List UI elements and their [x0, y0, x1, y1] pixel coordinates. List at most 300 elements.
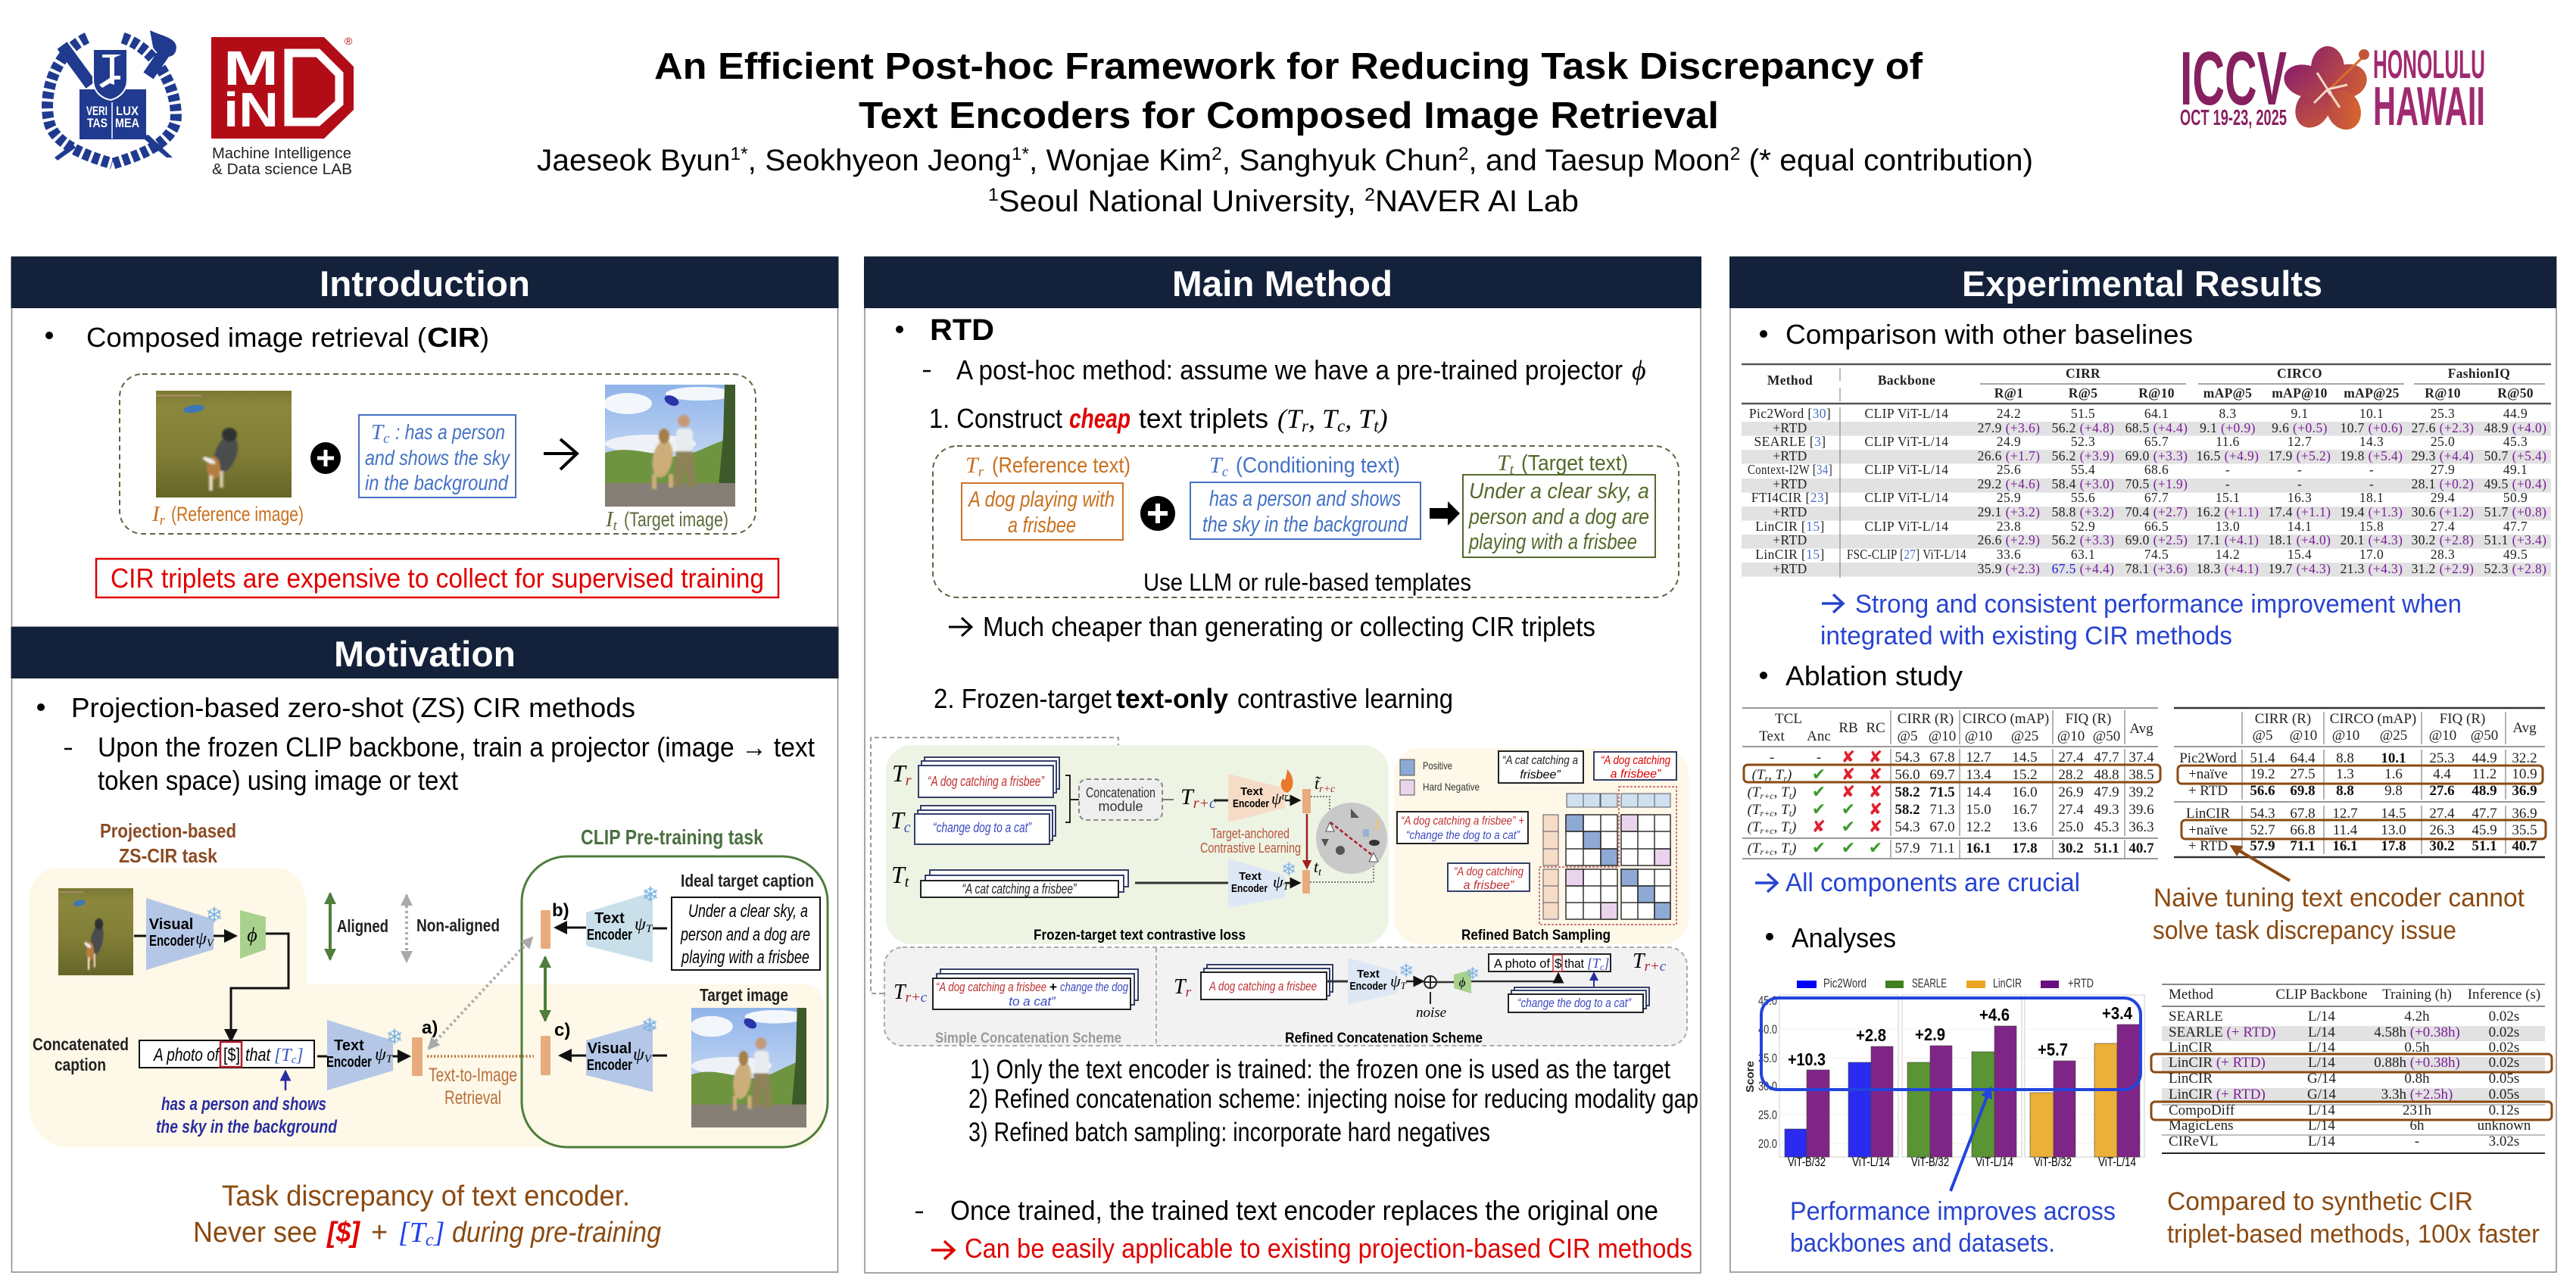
- trainable text encoder: [1228, 769, 1299, 822]
- table: baselines comparison: SEARLE [3]: [1754, 434, 1826, 449]
- caption template box: [T: [274, 1046, 292, 1065]
- table: training time comparison: CLIP Backbone: [2275, 987, 2368, 1003]
- heading: Main Method: [864, 257, 1701, 308]
- table: naive tuning: 54.3: [2250, 806, 2275, 822]
- text-to-image retrieval: Text-to-Image: [429, 1065, 517, 1086]
- panel: introduction: [11, 257, 839, 627]
- table: naive tuning: 56.6: [2250, 783, 2275, 799]
- stack: target text: [921, 870, 1228, 897]
- table: ablation components: 16.7: [2012, 802, 2038, 818]
- y axis: [1744, 993, 1777, 1151]
- table: training time comparison: L/14: [2308, 1055, 2335, 1071]
- logo: MIND lab: ®: [345, 35, 353, 47]
- refined scheme: ϕ: [1459, 975, 1466, 990]
- target text: [1463, 451, 1655, 557]
- table: baselines comparison: 20.1 (+4.3): [2341, 532, 2403, 547]
- table: training time comparison: MagicLens: [2169, 1118, 2233, 1134]
- legend: positive and hard negative: Hard Negative: [1423, 781, 1480, 793]
- reference image label: (Reference image): [171, 503, 304, 525]
- arrow: performance callout: [1951, 1089, 1990, 1191]
- frozen text encoder: Encoder: [1231, 882, 1268, 895]
- table: baselines comparison: CLIP ViT-L/14: [1865, 490, 1948, 505]
- logo: ICCV 2025 Honolulu Hawaii: [2180, 36, 2485, 137]
- chart legend: SEARLE: [1912, 976, 1947, 990]
- table: training time comparison: CIReVL: [2169, 1134, 2218, 1149]
- x axis labels: [1788, 1155, 2136, 1169]
- bullet: composed image retrieval: Composed image retrieval (: [86, 322, 426, 353]
- table: naive tuning: 35.5: [2512, 822, 2537, 838]
- chart legend: Pic2Word: [1823, 976, 1867, 990]
- refined scheme: “change the dog to a cat”: [1517, 996, 1632, 1010]
- table: ablation components: 16.0: [2012, 784, 2038, 800]
- text encoder b: Encoder: [587, 927, 632, 943]
- table: ablation components: r: [1783, 773, 1787, 784]
- table: baselines comparison: FTI4CIR [23]: [1751, 490, 1829, 505]
- table: baselines comparison: 28.1 (+0.2): [2412, 476, 2474, 491]
- authors: 1*: [1012, 144, 1029, 164]
- target image: [603, 385, 735, 507]
- frozen text encoder: [1228, 859, 1299, 908]
- table: ablation components: 49.3: [2094, 802, 2119, 818]
- ideal target caption: person and a dog are: [680, 925, 810, 945]
- table: naive tuning: 4.4: [2433, 766, 2451, 782]
- table: baselines comparison: 35.9 (+2.3): [1978, 561, 2040, 576]
- table: baselines comparison: Pic2Word [30]: [1749, 406, 1831, 421]
- numbered method notes: 2) Refined concatenation scheme: injecting noise for reducing modality gap: [968, 1084, 1698, 1114]
- input labels: t: [905, 874, 909, 890]
- refined scheme: ❄: [1399, 960, 1414, 981]
- refined scheme: Text: [1357, 968, 1380, 981]
- simple scheme: Simple Concatenation Scheme: [935, 1031, 1121, 1046]
- title: [654, 46, 1923, 136]
- table: baselines comparison: mAP@25: [2344, 385, 2400, 401]
- CIR triplet example: [120, 374, 756, 534]
- table: ablation components: t: [1789, 847, 1792, 857]
- table: ablation components: ✘: [1842, 783, 1855, 802]
- caption box: concatenated query: “A dog catching a frisbee” +: [1401, 815, 1524, 828]
- frozen text encoder: ψ: [1273, 872, 1283, 891]
- table: ablation components: 36.3: [2128, 819, 2154, 835]
- table: naive tuning: 11.2: [2472, 766, 2496, 782]
- table: naive tuning: [2174, 708, 2546, 857]
- note: 100x faster: [2167, 1187, 2540, 1249]
- table: ablation components: r+c: [1760, 808, 1774, 819]
- target text: Under a clear sky, a: [1469, 479, 1649, 504]
- logo: MIND lab: & Data science LAB: [212, 161, 352, 178]
- conditioning text box: in the background: [365, 471, 509, 494]
- heading: Motivation: Motivation: [334, 634, 516, 674]
- table: ablation components: 58.2: [1895, 784, 1920, 800]
- table: baselines comparison: +RTD: [1773, 476, 1807, 491]
- logo: ICCV 2025 Honolulu Hawaii: ICCV: [2180, 36, 2287, 121]
- step 1: cheap text triplets: (T: [1277, 404, 1302, 434]
- note: naive tuning: solve task discrepancy issue: [2153, 916, 2456, 945]
- improvement labels: +2.8: [1856, 1025, 1886, 1045]
- target-anchored contrastive learning: Contrastive Learning: [1200, 840, 1301, 856]
- bullet: projection-based methods: Projection-based zero-shot (ZS) CIR methods: [71, 692, 635, 723]
- caption box: cat catching frisbee: [1499, 751, 1583, 783]
- refined scheme: noise: [1416, 1005, 1446, 1021]
- conclusion: task discrepancy: [193, 1180, 661, 1250]
- visual encoder top: Encoder: [149, 933, 195, 950]
- table: ablation components: CIRCO (mAP): [1963, 711, 2049, 727]
- table: ablation components: ): [1791, 819, 1796, 835]
- aligned arrow between embeddings: [544, 957, 547, 1021]
- table: baselines comparison: 30.6 (+1.2): [2412, 504, 2474, 519]
- step 1: cheap text triplets: , T: [1345, 404, 1376, 434]
- diagram: refined batch sampling: [1394, 748, 1689, 944]
- reference text: a frisbee: [1008, 513, 1076, 538]
- table: naive tuning: 52.7: [2250, 822, 2275, 838]
- numbered method notes: 1) Only the text encoder is trained: the frozen one is used as the target: [970, 1055, 1670, 1084]
- table: naive tuning: 71.1: [2290, 838, 2316, 854]
- reference text: (Reference text): [992, 454, 1131, 478]
- table: ablation components: ): [1791, 802, 1796, 818]
- table: baselines comparison: R@50: [2497, 385, 2534, 401]
- table: baselines comparison: 65.7: [2144, 434, 2169, 449]
- table: ablation components: @10: [1929, 728, 1956, 744]
- legend: positive and hard negative: [1400, 759, 1480, 795]
- table: naive tuning: FIQ (R): [2440, 711, 2485, 727]
- text encoder a: T: [386, 1053, 394, 1065]
- table: baselines comparison: Backbone: [1878, 373, 1935, 388]
- authors: 1*: [731, 144, 748, 164]
- y axis: 45.0: [1758, 993, 1777, 1008]
- table: baselines comparison: R@1: [1994, 385, 2023, 401]
- table: naive tuning: Avg: [2512, 720, 2537, 736]
- table: baselines comparison: 70.5 (+1.9): [2125, 476, 2188, 491]
- input labels: [890, 759, 912, 890]
- table: baselines comparison: +RTD: [1773, 532, 1807, 547]
- table: naive tuning: 32.2: [2512, 750, 2537, 766]
- table: baselines comparison: 10.7 (+0.6): [2341, 420, 2403, 435]
- table: ablation components: , T: [1774, 784, 1790, 800]
- authors: 2: [1730, 144, 1740, 164]
- chart legend: LinCIR: [1993, 976, 2022, 990]
- table: baselines comparison: 16.5 (+4.9): [2197, 448, 2259, 463]
- diagram: frozen-target text contrastive loss: [871, 738, 1389, 993]
- simple scheme: to a cat”: [1009, 994, 1056, 1009]
- logo: Seoul National University: [48, 30, 176, 164]
- y axis: 40.0: [1758, 1022, 1777, 1037]
- table: baselines comparison: mAP@10: [2272, 385, 2328, 401]
- legend: non-aligned: Non-aligned: [416, 915, 500, 935]
- table: ablation components: RC: [1866, 720, 1885, 736]
- chart legend: +RTD: [2068, 976, 2094, 990]
- table: ablation components: 12.2: [1966, 819, 1991, 835]
- target image: [690, 985, 806, 1127]
- table: naive tuning: 47.7: [2472, 806, 2497, 822]
- table: baselines comparison: 52.3 (+2.8): [2484, 561, 2546, 576]
- text encoder a: ❄: [385, 1024, 404, 1049]
- refined scheme: A photo of: [1494, 956, 1550, 971]
- logo: Seoul National University: LUX: [116, 104, 139, 118]
- bullet: analyses: Analyses: [1792, 922, 1896, 953]
- text encoder b: Text: [594, 910, 625, 927]
- stack: reference text: [918, 757, 1059, 797]
- table: ablation components: @25: [2011, 728, 2038, 744]
- table: baselines comparison: Method: [1767, 373, 1813, 388]
- reference image label: I: [152, 502, 160, 526]
- target text: t: [1510, 462, 1514, 478]
- refined scheme: r+: [1645, 959, 1660, 975]
- table: baselines comparison: 15.1: [2216, 490, 2240, 505]
- table: naive tuning: 69.8: [2290, 783, 2316, 799]
- embedding a: [412, 1018, 438, 1076]
- input labels: T: [891, 861, 905, 888]
- table: ablation components: 30.2: [2058, 840, 2084, 856]
- table: baselines comparison: 27.9: [2431, 462, 2455, 477]
- reference text: [962, 453, 1131, 540]
- table: baselines comparison: 24.9: [1997, 434, 2021, 449]
- simple scheme: T: [893, 981, 906, 1004]
- plus icon: [1140, 496, 1175, 531]
- table: baselines comparison: 15.8: [2359, 519, 2384, 534]
- caption box: dog query: a frisbee”: [1464, 879, 1514, 892]
- table: ablation components: r: [1765, 773, 1769, 784]
- simple scheme: change the dog: [1060, 980, 1128, 994]
- text triplet example: [933, 446, 1679, 597]
- table: ablation components: 47.7: [2094, 750, 2119, 766]
- refined scheme: [1174, 950, 1667, 1046]
- authors: 2: [1212, 144, 1222, 164]
- step 2: text-only contrastive learning: text-only: [1116, 683, 1228, 714]
- table: ablation components: t: [1789, 791, 1792, 801]
- table: ablation components: 71.1: [1929, 840, 1955, 856]
- table: baselines comparison: 51.1 (+3.4): [2484, 532, 2546, 547]
- table: baselines comparison: 52.3: [2071, 434, 2095, 449]
- conditioning text input: the sky in the background: [156, 1117, 338, 1137]
- authors: Jaeseok Byun: [537, 144, 727, 177]
- table: ablation components: ✔: [1842, 800, 1855, 819]
- conditioning text box: [359, 415, 516, 497]
- table: ablation components: 37.4: [2128, 750, 2154, 766]
- input image: [58, 888, 133, 975]
- table: training time comparison: -: [2415, 1134, 2419, 1149]
- table: ablation components: ✘: [1869, 818, 1882, 837]
- table: training time comparison: 0.02s: [2489, 1024, 2519, 1040]
- table: training time comparison: LinCIR (+ RTD): [2169, 1087, 2266, 1102]
- conclusion: task discrepancy: +: [371, 1217, 388, 1249]
- authors: (* equal contribution): [1740, 144, 2033, 177]
- bars: [1785, 1024, 2140, 1157]
- text encoder b: ψ: [635, 915, 646, 934]
- table: baselines comparison: CLIP ViT-L/14: [1865, 519, 1948, 534]
- frozen text encoder: Text: [1239, 870, 1261, 883]
- table: baselines comparison: 17.4 (+1.1): [2269, 504, 2331, 519]
- callout: triplets are expensive: CIR triplets are expensive to collect for supervised training: [111, 563, 764, 594]
- table: ablation components: 69.7: [1929, 767, 1955, 783]
- table: training time comparison: 0.05s: [2489, 1071, 2519, 1087]
- table: ablation components: ✘: [1812, 818, 1826, 837]
- table: naive tuning: 57.9: [2250, 838, 2275, 854]
- text encoder b: [556, 882, 667, 962]
- y axis: 20.0: [1758, 1137, 1777, 1151]
- logo: MIND lab: iN: [223, 83, 279, 137]
- table: baselines comparison: CLIP ViT-L/14: [1865, 462, 1948, 477]
- heading: Main Method: Main Method: [1172, 264, 1392, 304]
- table: ablation components: 54.3: [1895, 750, 1920, 766]
- table: training time comparison: L/14: [2308, 1102, 2335, 1118]
- conditioning text box: : has a person: [395, 420, 505, 444]
- table: baselines comparison: 51.5: [2071, 406, 2095, 421]
- table: baselines comparison: FashionIQ: [2448, 366, 2510, 381]
- improvement labels: [1788, 1003, 2132, 1069]
- note: 100x faster: Compared to synthetic CIR: [2167, 1187, 2473, 1216]
- table: naive tuning: + RTD: [2188, 783, 2228, 799]
- refined scheme: ❄: [1466, 965, 1480, 984]
- table: ablation components: ✘: [1869, 783, 1882, 802]
- table: baselines comparison: 44.9: [2503, 406, 2528, 421]
- table: ablation components: (T: [1748, 819, 1760, 835]
- table: ablation components: r+c: [1760, 791, 1774, 801]
- conclusion: task discrepancy: c: [426, 1230, 434, 1250]
- block arrow: [1430, 501, 1460, 525]
- table: baselines comparison: 25.0: [2431, 434, 2455, 449]
- table: training time comparison: 231h: [2403, 1102, 2432, 1118]
- table: training time comparison: Method: [2169, 987, 2214, 1003]
- note: naive tuning: Naive tuning text encoder cannot: [2153, 884, 2525, 912]
- target text: (Target text): [1521, 451, 1628, 476]
- table: baselines comparison: 55.4: [2071, 462, 2095, 477]
- heading: Introduction: Introduction: [320, 264, 530, 304]
- highlight: improvement region: [1761, 998, 2141, 1090]
- note: consistent improvement: integrated with existing CIR methods: [1820, 622, 2232, 650]
- stack: target text: “A cat catching a frisbee”: [962, 881, 1077, 897]
- table: ablation components: FIQ (R): [2066, 711, 2111, 727]
- table: ablation components: , T: [1774, 840, 1790, 856]
- improvement labels: +2.9: [1915, 1024, 1945, 1044]
- heading: projection-based ZS-CIR task: [100, 819, 236, 867]
- improvement labels: +5.7: [2038, 1040, 2068, 1059]
- table: ablation components: (T: [1752, 767, 1765, 783]
- table: training time comparison: LinCIR: [2169, 1071, 2213, 1087]
- table: baselines comparison: 17.1 (+4.1): [2197, 532, 2259, 547]
- simple scheme: [893, 969, 1138, 1046]
- caption: frozen-target loss: Frozen-target text contrastive loss: [1034, 928, 1246, 943]
- note: all components crucial: All components are crucial: [1785, 869, 2080, 897]
- refined scheme: that: [1564, 956, 1584, 971]
- table: ablation components: 51.1: [2094, 840, 2119, 856]
- reference text: T: [965, 453, 978, 478]
- table: ablation components: @50: [2093, 728, 2120, 744]
- table: baselines comparison: -: [2225, 476, 2230, 491]
- table: ablation components: Anc: [1807, 728, 1831, 744]
- caption box: cat catching frisbee: frisbee”: [1520, 769, 1561, 781]
- x axis labels: ViT-B/32: [1788, 1155, 1826, 1169]
- note: performance improves: [1790, 1197, 2116, 1258]
- bullet: RTD: RTD: [930, 313, 994, 347]
- table: naive tuning: 27.5: [2290, 766, 2316, 782]
- table: baselines comparison: 19.8 (+5.4): [2341, 448, 2403, 463]
- table: baselines comparison: 31.2 (+2.9): [2412, 561, 2474, 576]
- table: baselines comparison: -: [2225, 462, 2230, 477]
- caption template box: [139, 1040, 314, 1068]
- table: naive tuning: CIRR (R): [2255, 711, 2311, 727]
- table: naive tuning: @5: [2252, 728, 2273, 744]
- table: baselines comparison: 28.3: [2431, 547, 2455, 562]
- refined scheme: ]: [1603, 956, 1609, 971]
- CLIP pre-training outline: [522, 856, 828, 1147]
- table: baselines comparison: 8.3: [2219, 406, 2237, 421]
- table: baselines comparison: 19.4 (+1.3): [2341, 504, 2403, 519]
- diagram: concatenation schemes: [884, 947, 1687, 1046]
- title: An Efficient Post-hoc Framework for Reducing Task Discrepancy of: [654, 46, 1923, 87]
- table: naive tuning: 13.0: [2381, 822, 2406, 838]
- arrow: naive callout: [2232, 847, 2290, 881]
- conclusion: task discrepancy: [$]: [326, 1217, 360, 1249]
- frozen text encoder: ❄: [1281, 859, 1296, 880]
- visual encoder c: Visual: [588, 1040, 632, 1057]
- target image label: I: [606, 507, 613, 532]
- step 1: cheap text triplets: c: [1337, 416, 1345, 435]
- bullet: composed image retrieval: ): [480, 322, 489, 353]
- table: ablation components: ): [1791, 784, 1796, 800]
- table: naive tuning: 36.9: [2512, 783, 2537, 799]
- table: training time comparison: [2151, 984, 2552, 1153]
- table: naive tuning: 27.6: [2429, 783, 2455, 799]
- heading: projection-based ZS-CIR task: Projection-based: [100, 819, 236, 842]
- input labels: c: [904, 819, 911, 836]
- affiliations: 2: [1364, 185, 1375, 205]
- table: naive tuning: 30.2: [2429, 838, 2455, 854]
- table: training time comparison: L/14: [2308, 1040, 2335, 1056]
- conditioning text: T: [1209, 453, 1222, 478]
- affiliations: 1: [988, 185, 999, 205]
- bar chart: backbone performance: [1744, 976, 2144, 1169]
- caption box: dog query: [1448, 863, 1530, 892]
- concatenated caption label: [33, 1034, 129, 1074]
- table: naive tuning: @10: [2290, 728, 2317, 744]
- embedding c: [541, 1020, 570, 1075]
- table: ablation components: ✔: [1842, 818, 1855, 837]
- table: baselines comparison: 25.3: [2431, 406, 2455, 421]
- conditioning text input: has a person and shows: [161, 1094, 326, 1115]
- authors: , Sanghyuk Chun: [1222, 144, 1458, 177]
- table: baselines comparison: CIRR: [2066, 366, 2100, 381]
- table: baselines comparison: +RTD: [1773, 504, 1807, 519]
- table: ablation components: 13.4: [1966, 767, 1991, 783]
- table: baselines comparison: Context-I2W [34]: [1748, 462, 1832, 477]
- x axis labels: ViT-L/14: [1976, 1155, 2013, 1169]
- text-to-image retrieval: Retrieval: [444, 1087, 501, 1109]
- table: baselines comparison: 29.4: [2431, 490, 2455, 505]
- table: baselines comparison: 15.4: [2288, 547, 2312, 562]
- caption box: dog catching frisbee: [1594, 752, 1676, 781]
- table: baselines comparison: 18.3 (+4.1): [2197, 561, 2259, 576]
- table: baselines comparison: 49.5: [2503, 547, 2528, 562]
- table: baselines comparison: 25.9: [1997, 490, 2021, 505]
- table: baselines comparison: R@5: [2069, 385, 2097, 401]
- simple scheme: +: [1049, 980, 1057, 994]
- table: training time comparison: G/14: [2307, 1071, 2337, 1087]
- table: baselines comparison: 69.0 (+2.5): [2125, 532, 2188, 547]
- table: ablation components: 47.9: [2094, 784, 2119, 800]
- table: ablation components: 14.5: [2012, 750, 2038, 766]
- projector phi: ϕ: [247, 924, 257, 946]
- table: ablation components: (T: [1748, 840, 1760, 856]
- logo: MIND lab: [211, 35, 354, 178]
- table: training time comparison: 0.05s: [2489, 1087, 2519, 1102]
- conditioning text box: T: [371, 420, 383, 444]
- concatenated caption label: Concatenated: [33, 1034, 129, 1054]
- table: baselines comparison: 21.3 (+4.3): [2341, 561, 2403, 576]
- table: baselines comparison: 14.1: [2288, 519, 2312, 534]
- diagram: projection-based ZS-CIR versus CLIP pre-training: [29, 819, 828, 1147]
- legend: non-aligned: [407, 895, 500, 962]
- table: baselines comparison: 58.4 (+3.0): [2052, 476, 2114, 491]
- table: naive tuning: 8.8: [2336, 783, 2354, 799]
